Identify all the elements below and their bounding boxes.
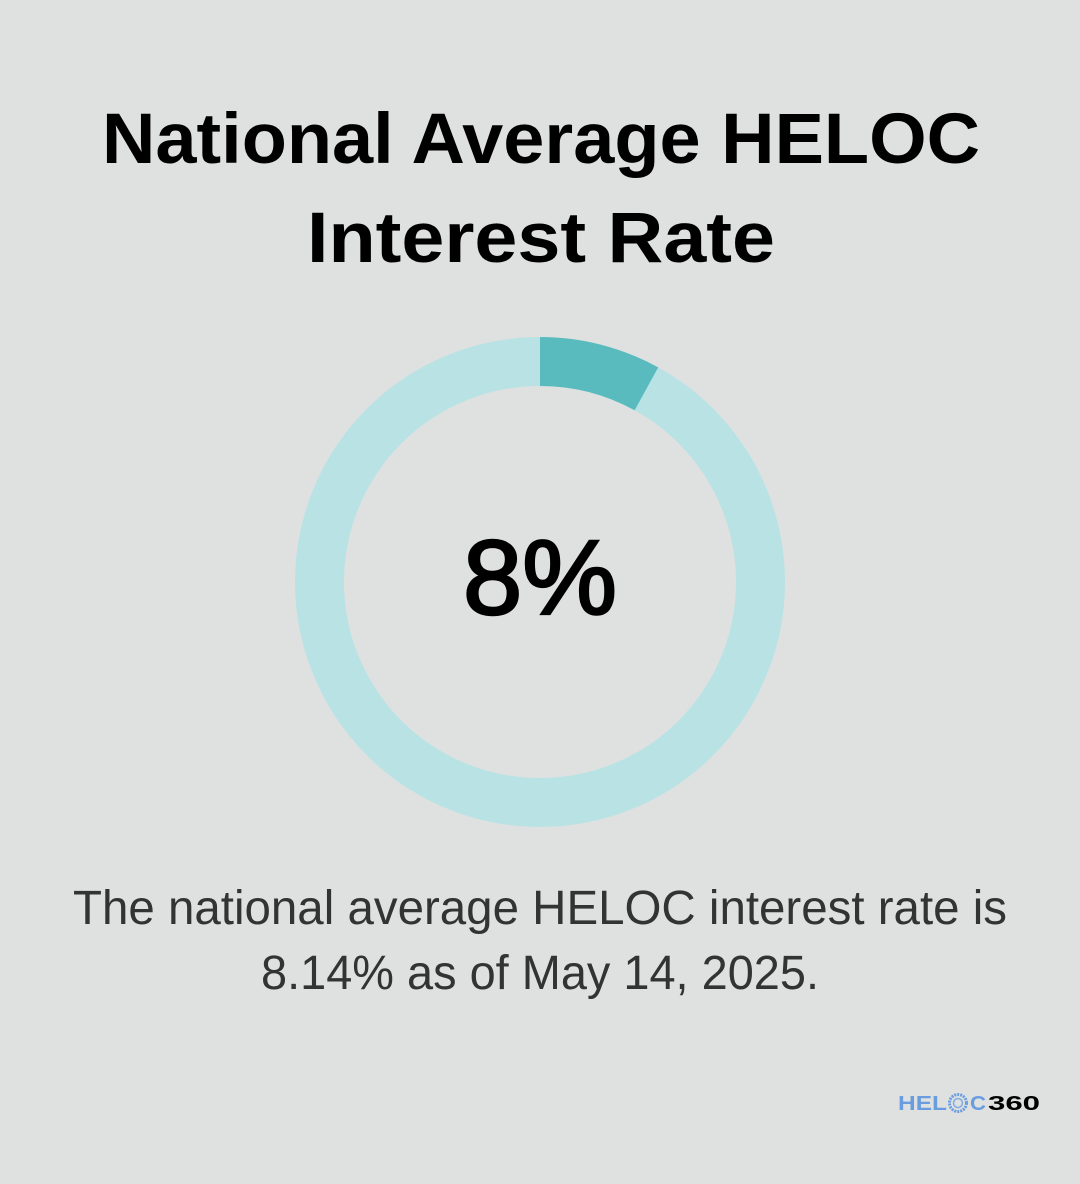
icon: logo swirl bbox=[950, 1094, 966, 1112]
donut highlighted segment bbox=[540, 337, 658, 410]
title: National Average HELOC bbox=[102, 100, 980, 179]
donut chart: 8% bbox=[320, 337, 760, 802]
logo text HEL: HEL bbox=[898, 1093, 947, 1115]
donut centre value: 8% bbox=[463, 519, 617, 637]
description text: 8.14% as of May 14, 2025. bbox=[261, 947, 819, 1000]
logo: HELOC360 bbox=[898, 1093, 1040, 1115]
description text: The national average HELOC interest rate is bbox=[73, 882, 1007, 935]
donut track bbox=[320, 362, 760, 802]
logo text C: C bbox=[970, 1093, 986, 1115]
description text bbox=[73, 882, 1007, 1000]
title bbox=[102, 100, 980, 278]
logo text 360: 360 bbox=[988, 1093, 1040, 1115]
title: Interest Rate bbox=[307, 199, 775, 278]
